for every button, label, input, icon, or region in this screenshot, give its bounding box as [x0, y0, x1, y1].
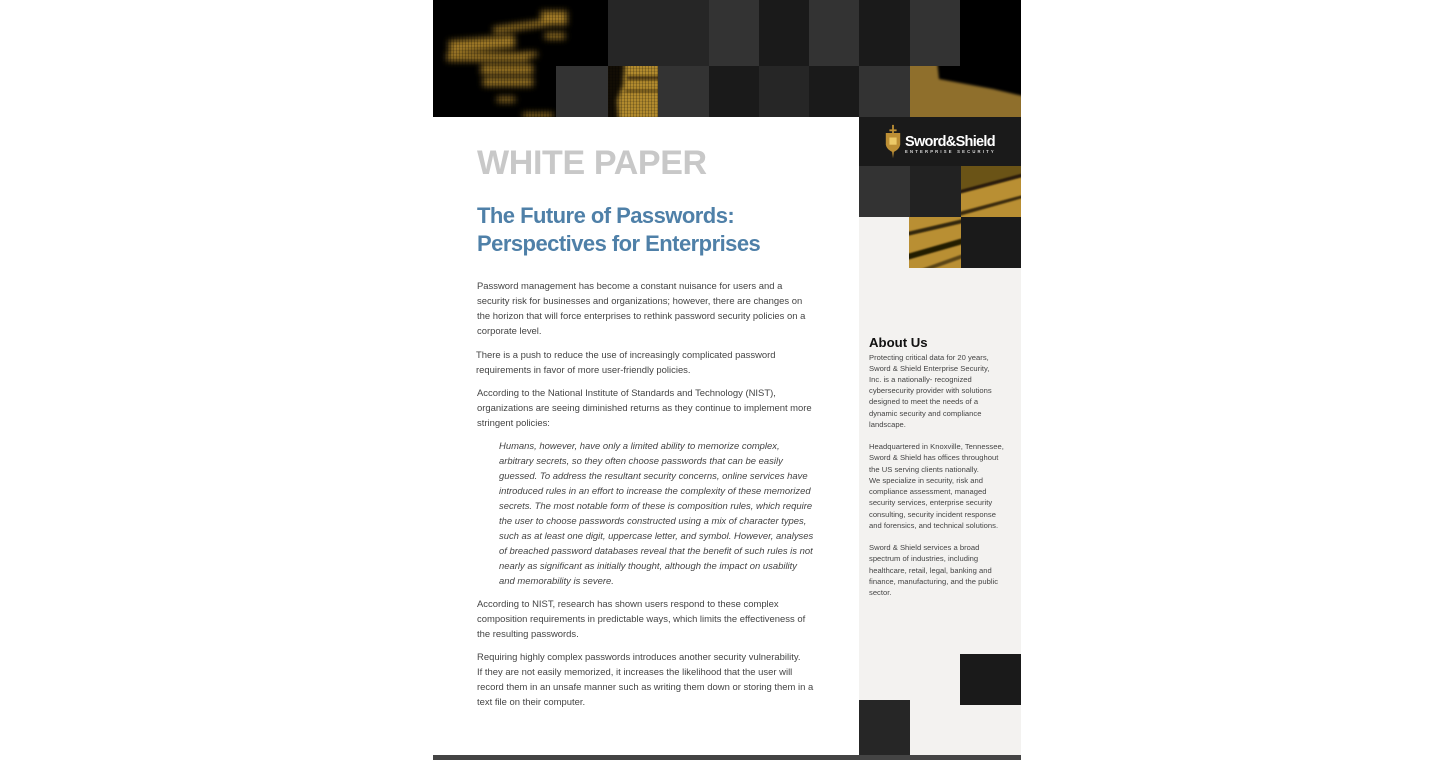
- about us text: consulting, security incident response: [869, 510, 996, 519]
- block quote: nearly as significant as initially thought, although the impact on usability: [499, 560, 797, 572]
- white paper heading: WHITE PAPER: [477, 144, 707, 182]
- about us text: dynamic security and compliance: [869, 409, 981, 418]
- paragraph: vulnerability: text file on their computer.: [477, 696, 585, 708]
- paragraph: vulnerability: [477, 652, 814, 708]
- paragraph: NIST: stringent policies:: [477, 418, 550, 428]
- paragraph: predictable ways: the resulting passwords.: [477, 628, 579, 640]
- paragraph: vulnerability: record them in an unsafe manner such as writing them down or storing them in a: [477, 682, 813, 692]
- about us text: Headquartered in Knoxville, Tennessee,: [869, 442, 1004, 451]
- paragraph: push to reduce: There is a push to reduce the use of increasingly complicated password: [476, 350, 776, 360]
- about us text: healthcare, retail, legal, banking and: [869, 566, 992, 575]
- block quote: [499, 440, 814, 586]
- paragraph: vulnerability: If they are not easily memorized, it increases the likelihood that the user will: [477, 666, 792, 678]
- lower tile: right: [960, 654, 1021, 705]
- document title: The Future of Passwords:: [477, 203, 734, 228]
- about us text: the US serving clients nationally.: [869, 465, 979, 474]
- about us text: cybersecurity provider with solutions: [869, 386, 992, 395]
- about us text: Sword & Shield Enterprise Security,: [869, 364, 989, 373]
- top banner: [433, 0, 1021, 117]
- intro paragraph: [477, 280, 806, 336]
- logo wordmark: Sword&Shield: [905, 134, 995, 150]
- paragraph: push to reduce: [476, 350, 776, 376]
- block quote: guessed. To address the resultant security concerns, online services have: [499, 470, 808, 482]
- block quote: and memorability is severe.: [499, 576, 614, 586]
- about us text: Inc. is a nationally- recognized: [869, 375, 972, 384]
- about us text: designed to meet the needs of a: [869, 397, 978, 406]
- paragraph: NIST: [477, 388, 812, 428]
- about us text: finance, manufacturing, and the public: [869, 577, 998, 586]
- logo block: [859, 117, 1021, 166]
- paragraph: predictable ways: [477, 598, 806, 640]
- about us text: Protecting critical data for 20 years,: [869, 352, 989, 362]
- about us text: spectrum of industries, including: [869, 554, 978, 563]
- block quote: the user to choose passwords constructed using a mix of character types,: [499, 516, 806, 526]
- about us text: compliance assessment, managed: [869, 487, 987, 496]
- about us text: Sword & Shield has offices throughout: [869, 453, 998, 462]
- bottom bar: [433, 755, 1021, 760]
- intro paragraph: the horizon that will force enterprises to rethink password security policies on a: [477, 310, 805, 322]
- about us text: sector.: [869, 588, 892, 597]
- about us text: Sword & Shield services a broad: [869, 543, 979, 552]
- paragraph: predictable ways: According to NIST, research has shown users respond to these complex: [477, 598, 779, 610]
- block quote: Humans, however, have only a limited ability to memorize complex,: [499, 440, 780, 452]
- about us text: security services, enterprise security: [869, 498, 992, 507]
- block quote: secrets. The most notable form of these is composition rules, which require: [499, 500, 812, 512]
- about us text: We specialize in security, risk and: [869, 476, 983, 485]
- document title: [477, 203, 760, 256]
- sidebar tile mosaic: [859, 166, 1021, 268]
- document title: Perspectives for Enterprises: [477, 231, 760, 256]
- paragraph: NIST: According to the National Institute of Standards and Technology (NIST),: [477, 388, 776, 398]
- about us text: [869, 352, 1004, 597]
- about us text: landscape.: [869, 420, 906, 429]
- intro paragraph: security risk for businesses and organizations; however, there are changes on: [477, 296, 802, 306]
- paragraph: NIST: organizations are seeing diminished returns as they continue to implement more: [477, 402, 812, 414]
- about us heading: About Us: [869, 335, 928, 350]
- block quote: of breached password databases reveal that the benefit of such rules is not: [499, 546, 813, 556]
- icon: sword and shield: [886, 124, 900, 158]
- block quote: such as at least one digit, uppercase letter, and symbol. However, analyses: [499, 530, 813, 542]
- sidebar panel: [859, 117, 1021, 755]
- block quote: introduced rules in an effort to increase the complexity of these memorized: [499, 486, 811, 496]
- lower tile: left: [859, 700, 910, 755]
- block quote: arbitrary secrets, so they often choose passwords that can be easily: [499, 456, 783, 466]
- paragraph: predictable ways: composition requirements in predictable ways, which limits the effectiveness of: [477, 614, 805, 624]
- paragraph: push to reduce: requirements in favor of more user-friendly policies.: [476, 364, 691, 376]
- logo tagline: ENTERPRISE SECURITY: [905, 149, 996, 154]
- about us text: and forensics, and technical solutions.: [869, 521, 998, 530]
- intro paragraph: Password management has become a constant nuisance for users and a: [477, 280, 782, 292]
- intro paragraph: corporate level.: [477, 326, 542, 336]
- paragraph: vulnerability: Requiring highly complex passwords introduces another security vulnerability.: [477, 652, 800, 662]
